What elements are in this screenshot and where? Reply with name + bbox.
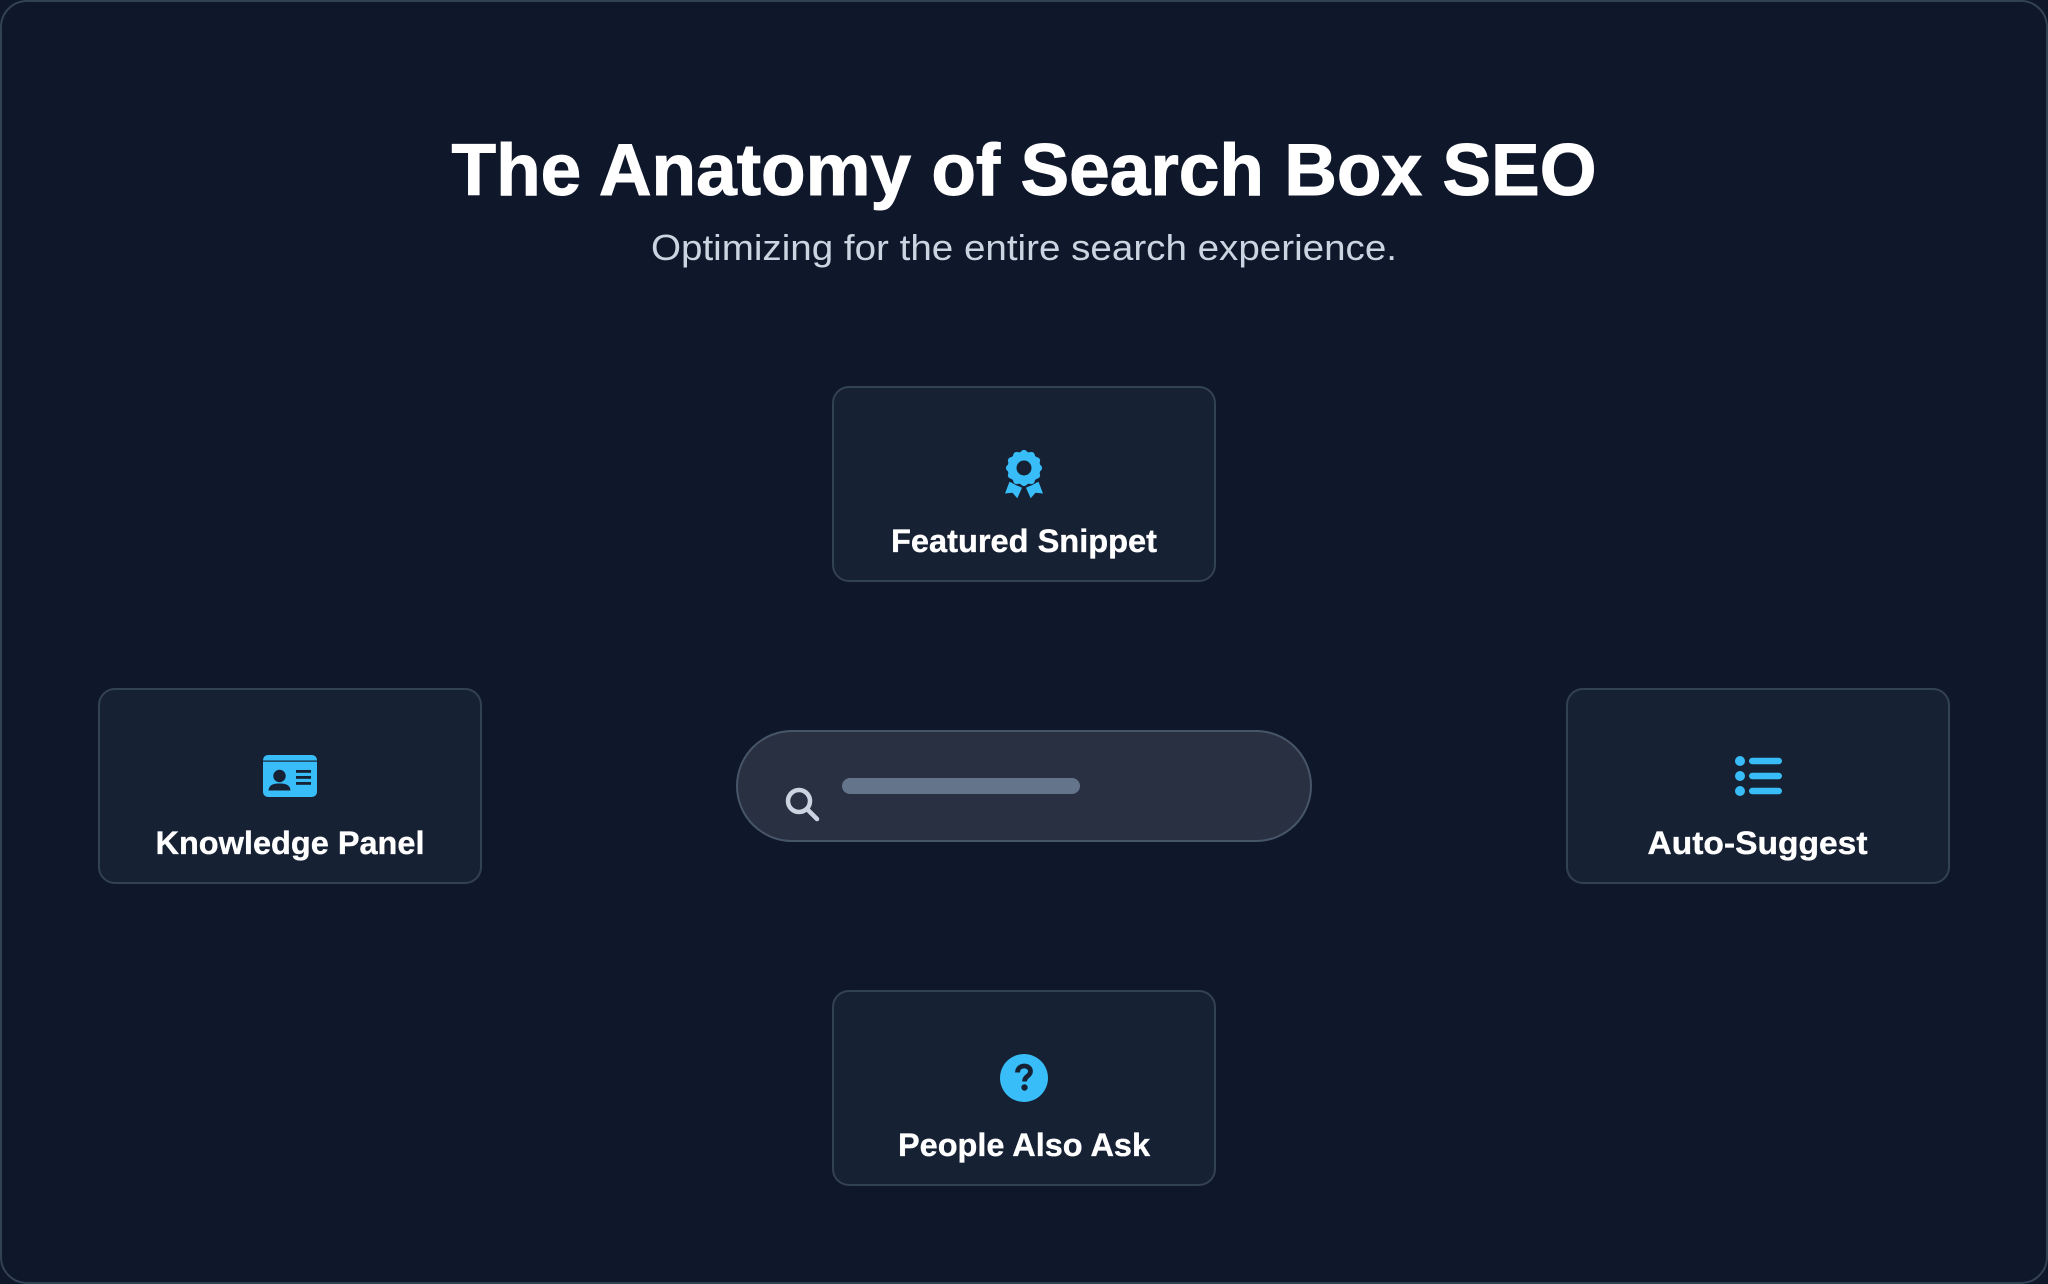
panel: auto-suggest bbox=[1567, 689, 1949, 883]
panel: people also ask bbox=[833, 991, 1215, 1185]
label: Auto-Suggest bbox=[1648, 825, 1868, 861]
icon: award ribbon bbox=[1005, 449, 1043, 498]
title: The Anatomy of Search Box SEO bbox=[452, 130, 1596, 211]
icon: list bbox=[1735, 756, 1782, 796]
panel: featured snippet bbox=[833, 387, 1215, 581]
icon: question circle bbox=[1000, 1054, 1048, 1102]
query placeholder bar bbox=[842, 778, 1080, 794]
subtitle: Optimizing for the entire search experience. bbox=[651, 227, 1397, 268]
icon: magnifier bbox=[788, 790, 817, 819]
label: Knowledge Panel bbox=[156, 825, 424, 861]
icon: id card bbox=[263, 755, 317, 797]
label: Featured Snippet bbox=[891, 523, 1157, 559]
label: People Also Ask bbox=[898, 1127, 1150, 1163]
panel: knowledge panel bbox=[99, 689, 481, 883]
search bar bbox=[737, 731, 1311, 841]
